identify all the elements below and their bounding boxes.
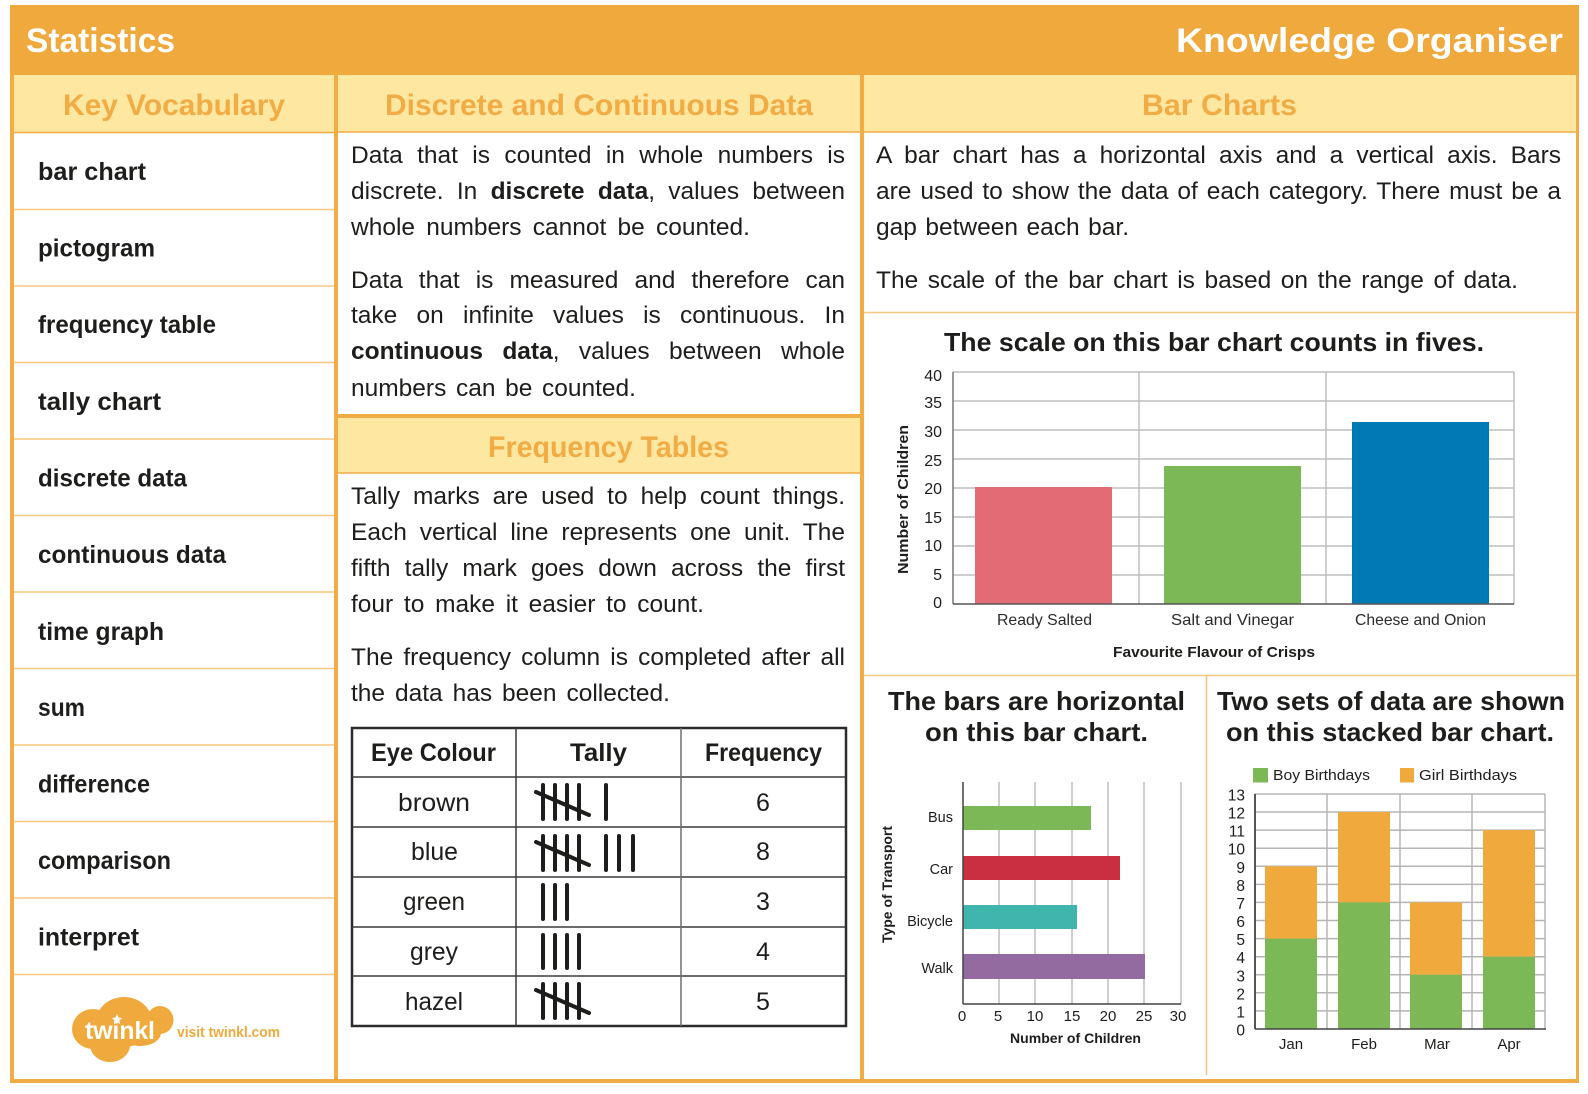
vocabulary list: tally chart [38,388,162,416]
bars: feb [1338,812,1390,1029]
horizontal bar chart: type of transport: 30 [1170,1008,1186,1025]
stacked bar chart: birthdays: 9 [1236,860,1245,877]
row: green: green [403,888,465,916]
horizontal bar chart: type of transport: 25 [1136,1008,1152,1025]
panel: key vocabulary [12,75,335,1062]
vocabulary list: frequency table [38,311,216,339]
bar chart: favourite flavour of crisps: 20 [924,481,942,498]
stacked bar chart: birthdays: 12 [1228,806,1245,822]
bars: apr [1483,830,1535,1029]
chart title: horizontal bars: on this bar chart. [925,717,1148,747]
stacked bar chart: birthdays: 8 [1236,878,1245,895]
text: tally explanation: Tally marks are used to help count things. [351,483,845,510]
bars: jan [1265,866,1317,1029]
bar chart: favourite flavour of crisps: 30 [924,424,942,441]
panel: frequency tables [336,416,862,1026]
bar: cheese and onion [1352,422,1489,604]
bar chart: favourite flavour of crisps: Salt and Vinegar [1171,612,1295,629]
vocabulary list [38,158,227,952]
heading: frequency tables: Frequency Tables [488,431,729,464]
table header row: Tally [570,739,627,767]
table header row: Eye Colour [371,739,496,767]
bars: mar [1410,902,1462,1029]
bar chart: favourite flavour of crisps [895,368,1514,661]
row: brown: 6 [756,789,770,817]
bar: ready salted [975,487,1112,604]
stacked bar chart: birthdays: Jan [1279,1036,1303,1053]
vocabulary list: pictogram [38,235,155,263]
bar chart: favourite flavour of crisps: 0 [933,595,942,612]
bar: walk [963,954,1145,979]
vocabulary list: bar chart [38,158,147,186]
horizontal bar chart: type of transport: Car [930,862,953,878]
title: Statistics: Statistics [26,22,175,60]
table header row: Frequency [705,739,822,767]
text: discrete and continuous explanation [351,137,847,409]
panel: bar charts [864,75,1576,1075]
row: grey [410,935,770,968]
bar: bus [963,806,1091,830]
stacked bar chart: birthdays: Apr [1497,1036,1521,1053]
text: discrete and continuous explanation: whole numbers cannot be counted. [351,214,750,241]
vocabulary list: discrete data [38,464,188,492]
bar chart: favourite flavour of crisps: 25 [924,453,942,470]
text: bar chart explanation: are used to show the data of each category. There must be a [876,178,1561,205]
vocabulary list: continuous data [38,541,227,569]
row: blue [411,836,770,870]
header bar [10,5,1579,75]
row: hazel: hazel [405,988,463,1016]
stacked bar chart: birthdays: 4 [1236,950,1245,967]
chart title: stacked bars [1217,686,1565,747]
horizontal bar chart: type of transport: Number of Children [1010,1030,1141,1046]
bar chart: favourite flavour of crisps: 5 [933,567,942,584]
row: brown: brown [398,789,470,817]
stacked bar chart: birthdays: 1 [1236,1004,1245,1021]
text: bar chart explanation [876,137,1563,302]
bar: car [963,856,1120,880]
title: Knowledge Organiser: Knowledge Organiser [1176,22,1563,60]
stacked bar chart: birthdays: 10 [1228,842,1245,859]
text: discrete and continuous explanation: numbers can be counted. [351,375,636,402]
bar: bicycle [963,905,1077,929]
stacked bar chart: birthdays: 6 [1236,914,1245,931]
bar chart: favourite flavour of crisps: 10 [924,538,942,555]
row: hazel [405,984,770,1018]
row: hazel: 5 [756,988,770,1016]
text: tally explanation: The frequency column is completed after all [351,644,845,671]
stacked bar chart: birthdays [1228,787,1546,1053]
stacked bar chart: birthdays: 7 [1236,896,1245,913]
text: discrete and continuous explanation: discrete. In discrete data, values between [351,178,845,205]
chart title: horizontal bars [888,686,1185,747]
vocabulary list: interpret [38,924,140,952]
twinkl logo [72,997,280,1062]
text: tally explanation: Each vertical line represents one unit. The [351,519,845,546]
row: green [403,885,770,919]
twinkl logo: visit twinkl.com [177,1025,280,1041]
text: bar chart explanation: gap between each bar. [876,214,1129,241]
row: blue: 8 [756,838,770,866]
table header row [371,739,822,767]
legend: Boy Birthdays [1273,767,1370,784]
stacked bar chart: birthdays: Mar [1424,1036,1450,1053]
stacked bar chart: birthdays: Feb [1351,1036,1377,1053]
horizontal bar chart: type of transport: Walk [921,961,954,977]
stacked bar chart: birthdays: 5 [1236,932,1245,949]
bar chart: favourite flavour of crisps: 35 [924,395,942,412]
row: green: 3 [756,888,770,916]
bar chart: favourite flavour of crisps: 40 [924,368,942,385]
chart title: scale counts in fives: The scale on this bar chart counts in fives. [944,327,1484,357]
bar: salt and vinegar [1164,466,1301,604]
panel: discrete and continuous data [338,75,860,409]
stacked bar chart: birthdays: 13 [1228,787,1245,804]
horizontal bar chart: type of transport: 10 [1027,1008,1043,1025]
text: tally explanation: fifth tally mark goes down across the first [351,555,845,582]
stacked bar chart: birthdays: 3 [1236,968,1245,985]
vocabulary list: sum [38,694,85,722]
bar chart: favourite flavour of crisps: Favourite Flavour of Crisps [1113,644,1315,661]
bar chart: favourite flavour of crisps: Cheese and Onion [1355,612,1486,629]
text: tally explanation: four to make it easier to count. [351,591,704,618]
bar chart: favourite flavour of crisps: 15 [924,510,942,527]
text: bar chart explanation: The scale of the bar chart is based on the range of data. [876,267,1518,294]
heading: discrete and continuous data: Discrete and Continuous Data [385,89,813,122]
stacked bar chart: birthdays: 11 [1229,824,1245,841]
chart title: horizontal bars: The bars are horizontal [888,686,1185,716]
horizontal bar chart: type of transport: 0 [958,1008,966,1025]
frequency table [352,728,846,1026]
vocabulary list: comparison [38,847,171,875]
text: discrete and continuous explanation: continuous data, values between whole [351,338,845,365]
text: bar chart explanation: A bar chart has a horizontal axis and a vertical axis. Bars [876,142,1561,169]
chart title: stacked bars: Two sets of data are shown [1217,686,1565,716]
chart title: stacked bars: on this stacked bar chart. [1226,717,1554,747]
stacked bar chart: birthdays: 0 [1236,1022,1245,1040]
horizontal bar chart: type of transport: Bus [928,810,953,826]
vocabulary list: time graph [38,618,164,646]
horizontal bar chart: type of transport: Type of Transport [879,826,895,943]
heading: key vocabulary: Key Vocabulary [63,89,285,122]
row: blue: blue [411,838,458,866]
twinkl logo: twinkl [85,1017,155,1045]
horizontal bar chart: type of transport: 15 [1064,1008,1080,1025]
horizontal bar chart: type of transport: Bicycle [907,914,953,930]
text: discrete and continuous explanation: Data that is measured and therefore can [351,267,845,294]
bar chart: favourite flavour of crisps: Ready Salted [997,612,1092,629]
heading: bar charts: Bar Charts [1142,89,1297,122]
horizontal bar chart: type of transport: 5 [994,1008,1002,1025]
vocabulary list: difference [38,770,150,798]
text: tally explanation [351,478,847,715]
stacked bar chart: birthdays: 2 [1236,986,1245,1003]
bar chart: favourite flavour of crisps: Number of Children [895,425,912,574]
row: grey: grey [410,938,458,966]
row: brown [398,785,770,819]
horizontal bar chart: type of transport [879,782,1186,1046]
text: tally explanation: the data has been collected. [351,680,670,707]
row: grey: 4 [756,938,770,966]
legend [1253,767,1517,784]
text: discrete and continuous explanation: Data that is counted in whole numbers is [351,142,845,169]
legend: Girl Birthdays [1419,767,1517,784]
text: discrete and continuous explanation: take on infinite values is continuous. In [351,302,845,329]
horizontal bar chart: type of transport: 20 [1100,1008,1116,1025]
